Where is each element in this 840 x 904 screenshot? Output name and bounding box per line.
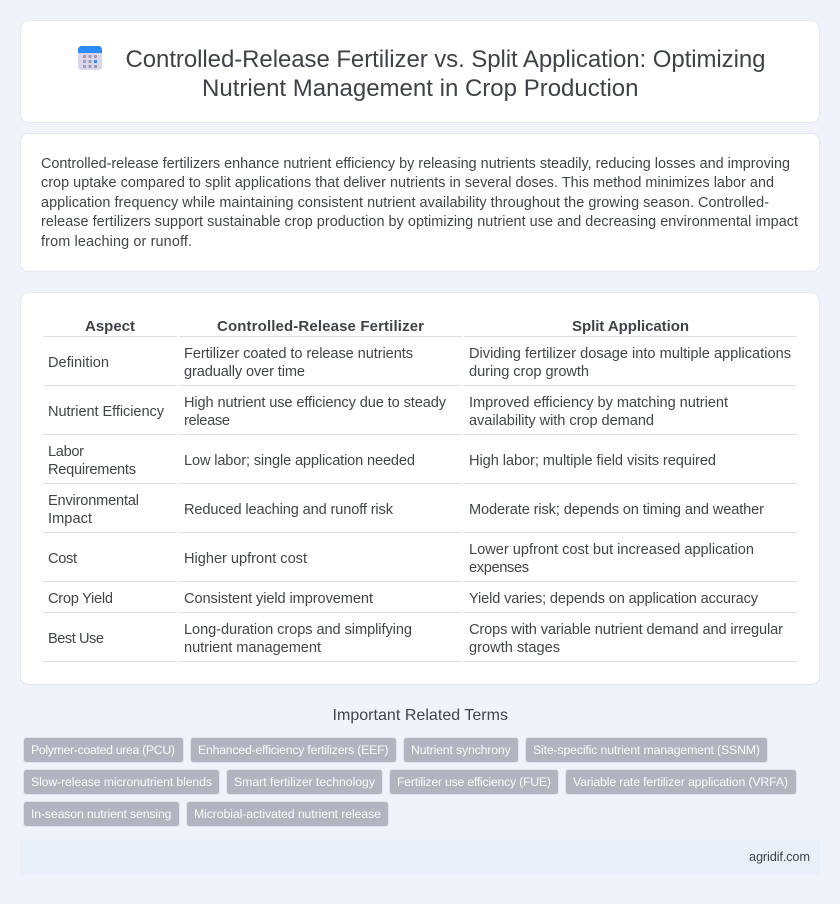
heading: related terms: Important Related Terms	[332, 707, 508, 724]
row: best use: nutrient management	[184, 640, 321, 656]
row: definition: Definition	[48, 355, 109, 371]
row: nutrient efficiency: availability with crop demand	[469, 413, 654, 429]
row: crop yield	[48, 591, 759, 607]
row: definition	[48, 346, 791, 380]
panel: related term chips: Site-specific nutrient management (SSNM)	[533, 743, 760, 757]
row: best use: Best Use	[48, 631, 104, 647]
footer	[20, 840, 820, 874]
panel: related term chips	[24, 738, 796, 826]
panel: related term chips: Fertilizer use efficiency (FUE)	[397, 775, 551, 789]
footer: agridif.com	[749, 849, 810, 864]
row: cost: expenses	[469, 560, 529, 576]
row: best use: Long-duration crops and simplifying	[184, 622, 412, 638]
table header row: Aspect	[85, 318, 135, 335]
panel: related term chips: Microbial-activated nutrient release	[194, 807, 381, 821]
text block: introduction paragraph	[41, 156, 798, 250]
row: nutrient efficiency: release	[184, 413, 230, 429]
header panel	[20, 20, 820, 122]
row: cost: Lower upfront cost but increased application	[469, 542, 754, 558]
text block: introduction paragraph: application frequency while maintaining consistent nutrient availability throughout the growing season. Controlled-	[41, 195, 769, 211]
panel: comparison table	[20, 292, 820, 684]
panel: related term chips: Slow-release micronutrient blends	[31, 775, 212, 789]
title	[126, 46, 766, 102]
row: environmental impact: Environmental	[48, 493, 139, 509]
row: crop yield: Consistent yield improvement	[184, 591, 373, 607]
row: definition: during crop growth	[469, 364, 589, 380]
row: environmental impact: Reduced leaching and runoff risk	[184, 502, 394, 518]
row: cost	[48, 542, 754, 576]
row: definition: Fertilizer coated to release nutrients	[184, 346, 413, 362]
text block: introduction paragraph: crop uptake compared to split applications that deliver nutrients in several doses. This method minimizes labor and	[41, 175, 774, 191]
panel: related term chips: Smart fertilizer technology	[234, 775, 376, 789]
row: definition: gradually over time	[184, 364, 305, 380]
row: labor requirements	[48, 444, 716, 478]
row: nutrient efficiency: Improved efficiency by matching nutrient	[469, 395, 728, 411]
table header row: Controlled-Release Fertilizer	[217, 318, 424, 335]
row: crop yield: Crop Yield	[48, 591, 113, 607]
row: nutrient efficiency: Nutrient Efficiency	[48, 404, 165, 420]
row: environmental impact	[48, 493, 764, 527]
panel: introduction	[20, 134, 820, 272]
row: best use: Crops with variable nutrient demand and irregular	[469, 622, 783, 638]
table header row	[85, 318, 689, 335]
row: labor requirements: Low labor; single application needed	[184, 453, 415, 469]
text block: introduction paragraph: from leaching or runoff.	[41, 234, 192, 250]
panel: related term chips: Nutrient synchrony	[411, 743, 512, 757]
row: crop yield: Yield varies; depends on application accuracy	[469, 591, 759, 607]
row: cost: Cost	[48, 551, 77, 567]
panel: related term chips: Enhanced-efficiency fertilizers (EEF)	[198, 743, 388, 757]
row: environmental impact: Impact	[48, 511, 92, 527]
row: definition: Dividing fertilizer dosage into multiple applications	[469, 346, 791, 362]
row: labor requirements: Requirements	[48, 462, 136, 478]
title: Nutrient Management in Crop Production	[202, 75, 638, 102]
panel: related term chips: In-season nutrient sensing	[31, 807, 172, 821]
text block: introduction paragraph: Controlled-release fertilizers enhance nutrient efficiency by releasing nutrients steadily, reducing losses and improving	[41, 156, 790, 172]
panel: related term chips: Polymer-coated urea (PCU)	[31, 743, 175, 757]
title: Controlled-Release Fertilizer vs. Split Application: Optimizing	[126, 46, 766, 73]
panel: related term chips: Variable rate fertilizer application (VRFA)	[573, 775, 788, 789]
row: environmental impact: Moderate risk; depends on timing and weather	[469, 502, 764, 518]
icon: calendar	[78, 46, 102, 70]
row: best use	[48, 622, 783, 656]
table header row: Split Application	[572, 318, 689, 335]
row: best use: growth stages	[469, 640, 560, 656]
row: labor requirements: Labor	[48, 444, 84, 460]
row: cost: Higher upfront cost	[184, 551, 307, 567]
text block: introduction paragraph: release fertilizers support sustainable crop production by optimizing nutrient use and decreasing environmental impact	[41, 214, 798, 230]
row: labor requirements: High labor; multiple field visits required	[469, 453, 716, 469]
row: nutrient efficiency: High nutrient use efficiency due to steady	[184, 395, 447, 411]
row: nutrient efficiency	[48, 395, 728, 429]
